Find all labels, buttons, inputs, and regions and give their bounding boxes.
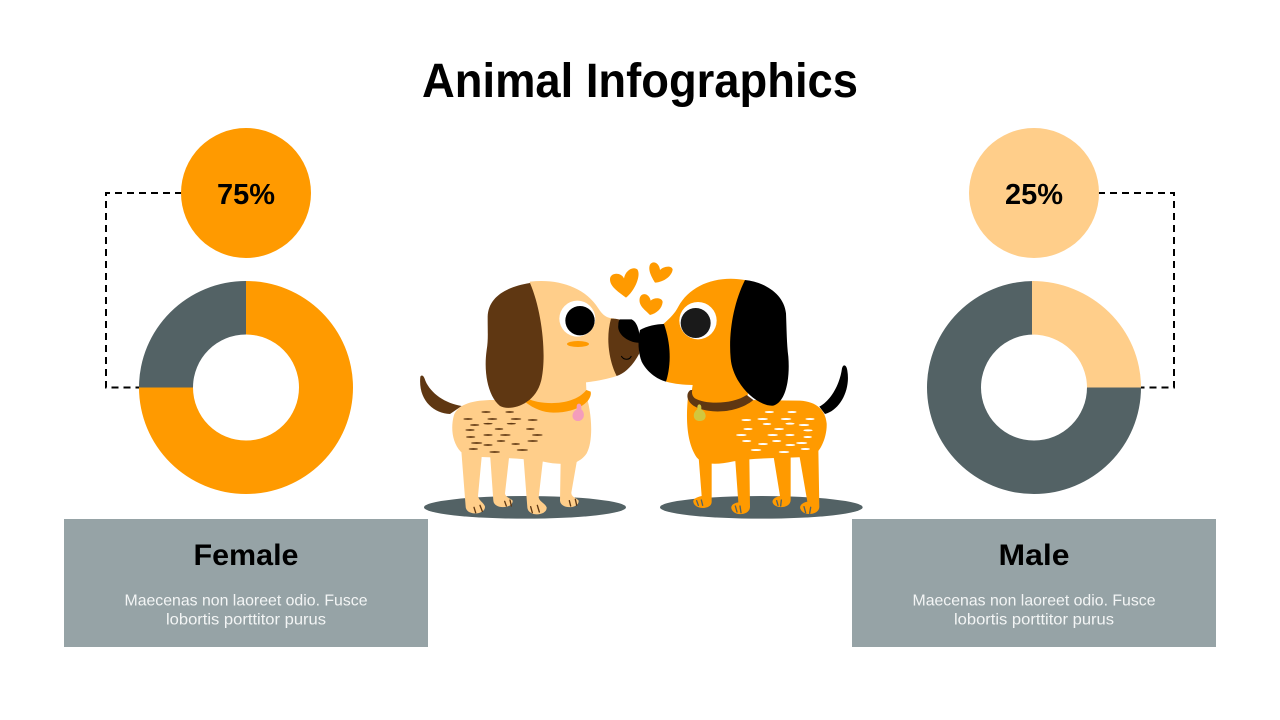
panel: male statistics	[852, 128, 1216, 647]
card: male	[852, 519, 1216, 647]
card: female: Female	[194, 539, 298, 572]
dashed connector: female	[106, 193, 182, 388]
icon: top heart	[649, 262, 673, 283]
panel: female statistics	[64, 128, 428, 647]
donut chart: male 25 percent	[927, 281, 1141, 494]
card: male: Male	[998, 539, 1070, 572]
illustration: female dog	[420, 281, 640, 519]
icon: small heart	[640, 294, 663, 315]
donut chart: female 75 percent	[139, 281, 353, 494]
card: male: Maecenas non laoreet odio. Fusce	[912, 592, 1156, 610]
badge: 75 percent	[181, 128, 311, 258]
dashed connector: male	[1098, 193, 1174, 388]
badge: 75 percent: 75%	[217, 179, 275, 211]
card: female: lobortis porttitor purus	[166, 612, 326, 628]
icon: large heart	[610, 268, 639, 298]
card: female	[64, 519, 428, 647]
illustration: male dog	[638, 279, 863, 519]
badge: 25 percent	[969, 128, 1099, 258]
icon: three hearts	[610, 262, 673, 315]
card: male: lobortis porttitor purus	[954, 612, 1114, 628]
title: Animal Infographics	[422, 55, 858, 108]
card: female: Maecenas non laoreet odio. Fusce	[124, 592, 368, 610]
badge: 25 percent: 25%	[1005, 179, 1063, 211]
